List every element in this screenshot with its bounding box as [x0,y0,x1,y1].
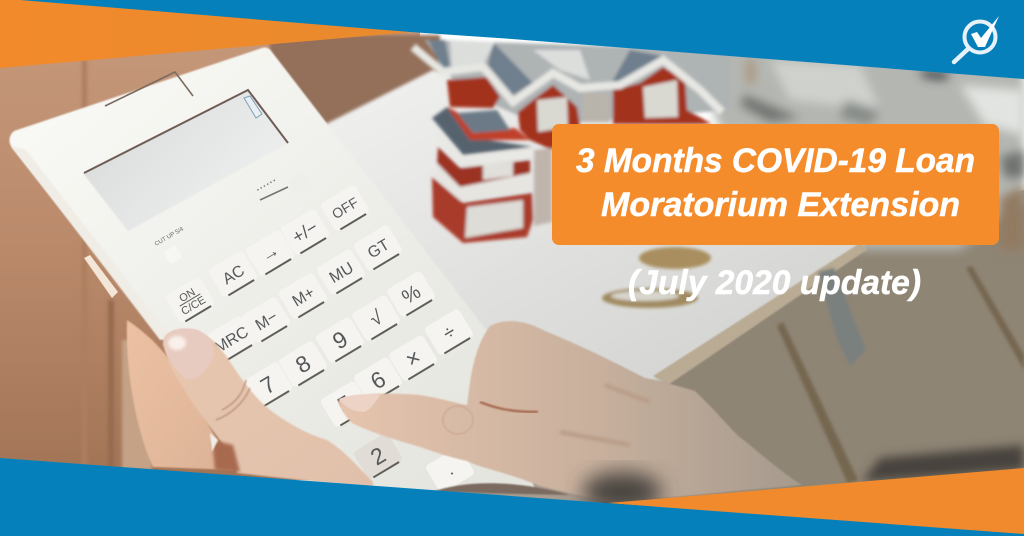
display screen [83,90,288,231]
thumb knuckle [216,380,250,420]
left hand [127,320,373,488]
thumb nail [164,329,214,379]
keys row 3: √ [366,307,387,331]
notebook edge [653,243,868,385]
fingernail [339,394,380,412]
keys row 4: 6 [366,366,390,394]
keys row 4: ÷ [439,321,460,345]
calculator side face [12,146,172,340]
display digit [244,96,262,118]
eave white [437,130,540,167]
blurred dark floor shadow [862,445,1024,482]
roof slate panels [428,40,662,95]
subtitle: (July 2020 update) [628,264,921,302]
right hand [338,321,802,512]
keys row 1: +/− [289,217,321,247]
thumb [163,329,373,488]
keys row 1: OFF [329,194,361,222]
bottom orange banner [608,468,1024,536]
upper right backdrop [690,40,1024,250]
keys row 2: M+ [290,284,318,310]
bottom blue banner [0,458,1024,536]
top orange banner [0,0,412,68]
white band [435,163,530,200]
keys row 2 [206,224,403,363]
small middle window [583,93,610,122]
finger shadow at bottom [432,483,570,495]
house upper roof backdrop [425,40,730,125]
wood table upper [270,35,440,125]
gap between fingers [480,402,538,412]
house windows [537,80,678,132]
logo: magnifier with check [954,16,999,62]
keys row 4: × [401,343,425,373]
calculator body [9,48,535,495]
rounding slider: • • • • • • [256,178,277,194]
red strip [437,147,530,187]
top blue banner [20,0,1024,79]
upper right blurred patches [740,60,1024,250]
knuckle crease [443,406,473,434]
knuckle mark [560,385,650,445]
keys row 1: ON [177,286,198,305]
side wing [534,148,552,226]
decimal switch [154,226,185,265]
keys row 5: . [442,459,457,479]
title line 2: Moratorium Extension [601,186,960,224]
keys row 2: GT [365,236,393,262]
wood plank lines right [777,266,1024,484]
small white window [483,160,513,180]
roof white patches [450,40,590,80]
nail highlight [168,336,186,350]
hand and index finger [338,321,802,503]
wood plank grooves [82,60,152,480]
top slot [105,72,193,106]
keys row 1: → [257,240,283,266]
mid roof red band [447,107,530,140]
display top edge [84,90,288,173]
keys row 2: M− [253,308,281,334]
house red walls [447,67,712,150]
keys row 2: MRC [212,324,252,357]
keys row 2: MU [327,260,357,287]
title line 1: 3 Months COVID-19 Loan [576,142,975,180]
keys row 3: % [398,281,425,309]
keys row 1: C/CE [179,294,208,318]
white roofline [413,47,722,112]
keys row 4: 5 [333,390,357,418]
palm shadow [212,440,240,472]
keys row 4 [320,308,474,428]
title box [552,124,999,245]
keys row 3: 7 [256,371,280,399]
wood table right [600,190,1024,510]
keys row 5 [353,432,475,494]
lower red wall [432,177,533,243]
notebook paper [326,70,865,382]
coins [602,247,711,308]
keys row 3 [243,270,436,409]
side button [84,255,118,298]
decimal switch: CUT UP 5/4 [154,226,185,248]
mid roof slate [457,110,510,133]
calculator corner between fingers [210,433,218,452]
wood table left [0,0,420,480]
keys row 1: AC [220,262,248,288]
base under calculator and hand [400,360,660,510]
hand bottom shadow [582,472,662,512]
rounding slider [256,172,311,200]
keys row 3: 9 [328,326,352,354]
pen [818,268,866,366]
keys row 3: 8 [291,350,315,378]
model house [413,40,730,243]
left palm [127,320,235,470]
calculator [9,48,535,495]
keys row 5: 2 [366,442,390,470]
mid roof [432,107,533,155]
lower window [465,200,523,238]
keys row 1 [165,184,370,324]
